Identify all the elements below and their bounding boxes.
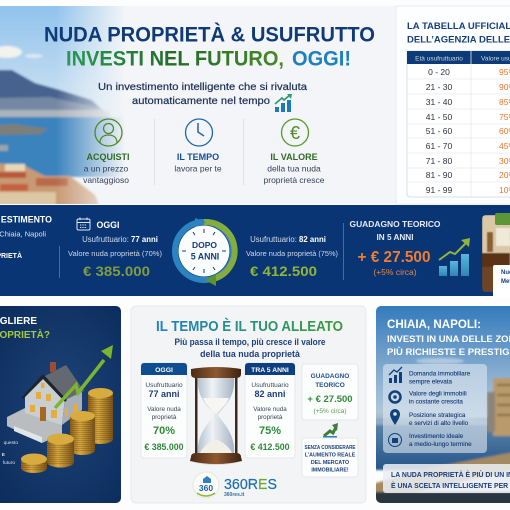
icon: euro: € [290, 123, 300, 143]
card: tra 5 anni: 75% [259, 425, 281, 437]
benefit: investimento: a medio-lungo termine [409, 441, 472, 448]
five years column: Usufruttuario: 82 anni [250, 235, 326, 244]
card: oggi: € 385.000 [144, 442, 184, 452]
feature: il valore: della tua nuda [267, 164, 321, 174]
card: senza considerare [302, 438, 358, 477]
logo: 360RES: 360res.it [224, 492, 245, 498]
heading: CHIAIA, NAPOLI: [387, 319, 481, 331]
banner left text [0, 214, 52, 260]
card: oggi: Valore nuda [147, 406, 181, 413]
card: oggi [141, 363, 187, 458]
title: OGGI! [292, 46, 351, 70]
table: 91 - 99 [426, 185, 453, 195]
five years column: Valore nuda proprietà (75%) [246, 251, 338, 258]
heading [387, 319, 510, 358]
theoretical gain: IN 5 ANNI [376, 233, 414, 242]
feature: il tempo [174, 152, 222, 174]
icon: growth chart [275, 94, 292, 112]
benefit: valore [390, 390, 467, 406]
card: tra 5 anni: TRA 5 ANNI [251, 367, 289, 374]
illustration: hourglass [190, 367, 242, 465]
title [44, 22, 375, 70]
card: oggi: Usufruttuario [145, 382, 183, 389]
card: oggi: 77 anni [148, 389, 180, 399]
feature: acquisti [83, 152, 130, 185]
title: INVESTI NEL FUTURO, [66, 46, 284, 70]
feature: il valore [264, 152, 325, 185]
icon: euro [282, 119, 308, 146]
panel: time is your ally [131, 306, 366, 503]
table: 61 - 70 [426, 141, 453, 151]
photo: Chiaia seafront [372, 302, 510, 506]
five years column: € 412.500 [250, 263, 317, 279]
banner left text: ESTIMENTO [1, 214, 52, 224]
table: 81 - 90 [426, 170, 453, 180]
card: guadagno teorico: TEORICO [315, 382, 345, 389]
card: guadagno teorico [302, 364, 358, 420]
today column: € 385.000 [83, 263, 150, 279]
card: guadagno teorico: + € 27.500 [307, 394, 353, 405]
card: senza considerare: DEL MERCATO [311, 460, 349, 466]
card: senza considerare: SENZA CONSIDERARE [304, 445, 356, 451]
feature: acquisti: ACQUISTI [86, 152, 130, 162]
card: tra 5 anni: Usufruttuario [251, 382, 289, 389]
benefit: posizione: Posizione strategica [409, 412, 466, 419]
illustration: house and coins [7, 345, 113, 473]
card: tra 5 anni: proprietà [258, 414, 283, 421]
today column: OGGI [97, 220, 119, 230]
benefit: domanda [389, 367, 471, 386]
panel: chiaia, napoli [372, 302, 510, 506]
heading [0, 317, 50, 338]
table heading [407, 21, 510, 46]
subtitle: Un investimento intelligente che si rivaluta [98, 82, 307, 93]
subtitle [98, 82, 307, 107]
feature: il valore: IL VALORE [270, 152, 318, 162]
subheading: della tua nuda proprietà [200, 349, 300, 359]
card: tra 5 anni: 82 anni [254, 389, 286, 399]
benefit: valore: in costante crescita [409, 398, 463, 406]
five years column [246, 235, 338, 279]
card: tra 5 anni [245, 363, 295, 458]
caption fragments [2, 441, 18, 464]
heading: IL TEMPO È IL TUO ALLEATO [156, 318, 343, 335]
benefit: valore: Valore degli immobili [409, 390, 467, 398]
icon: clock [186, 119, 212, 146]
today column: Valore nuda proprietà (70%) [68, 251, 162, 258]
theoretical gain [350, 220, 441, 277]
logo: 360RES: 360RES [224, 477, 277, 493]
table: 41 - 50 [426, 112, 453, 122]
coin stack 4 [88, 388, 113, 444]
hero photo: Gulf of Naples [0, 2, 130, 208]
panel: official table [396, 6, 510, 204]
card: guadagno teorico: GUADAGNO [311, 373, 349, 380]
logo: 360RES [193, 472, 277, 498]
table: 71 - 80 [426, 156, 453, 166]
coin stack 1 [21, 454, 47, 473]
caption fragments: questo [4, 440, 18, 446]
benefit: posizione: e servizi di alto livello [409, 420, 469, 427]
table: Età usufruttuario [415, 56, 463, 62]
card: property photo [482, 213, 510, 298]
theoretical gain: + € 27.500 [358, 249, 430, 266]
table [407, 51, 510, 197]
title: NUDA PROPRIETÀ & USUFRUTTO [44, 22, 375, 46]
benefit: domanda: Domanda immobiliare [409, 370, 471, 378]
benefit: investimento: Investimento ideale [409, 433, 464, 440]
benefit: domanda: sempre elevata [409, 378, 453, 386]
feature: il tempo: lavora per te [174, 164, 222, 174]
icon: clock after 5 years: 5 ANNI [191, 252, 219, 262]
today column [68, 220, 162, 279]
coin stack 3 [70, 411, 95, 455]
subheading: Più passa il tempo, più cresce il valore [174, 337, 326, 347]
icon: person [95, 119, 122, 146]
coin stack 2 [47, 434, 74, 468]
banner left text: Chiaia, Napoli [0, 230, 46, 238]
panel: why choose [0, 306, 121, 503]
card: tra 5 anni: Valore nuda [253, 406, 287, 413]
logo: 360RES: 360 [199, 483, 213, 493]
benefit list [383, 364, 487, 453]
caption fragments: futuro [3, 460, 15, 466]
feature: acquisti: vantaggioso [83, 175, 129, 185]
subtitle: automaticamente nel tempo [132, 96, 270, 107]
panel: blue banner [0, 205, 510, 298]
panel: hero [0, 2, 396, 208]
table: 51 - 60 [426, 126, 453, 136]
card: tra 5 anni: € 412.500 [250, 442, 290, 452]
icon: calendar [77, 218, 90, 230]
card: oggi: OGGI [155, 367, 173, 374]
benefit: posizione [390, 409, 468, 425]
table: 0 - 20 [428, 67, 450, 77]
feature: il valore: proprietà cresce [264, 175, 325, 185]
card: guadagno teorico: (+5% circa) [313, 408, 347, 415]
card: oggi: 70% [153, 425, 175, 437]
today column: Usufruttuario: 77 anni [82, 235, 158, 244]
theoretical gain: (+5% circa) [373, 267, 417, 277]
icon: green arrow [323, 423, 338, 438]
callout [383, 464, 510, 493]
caption fragments: E [2, 452, 6, 458]
table: 31 - 40 [426, 97, 453, 107]
feature: acquisti: a un prezzo [84, 164, 128, 174]
subheading [174, 337, 326, 359]
table: 21 - 30 [426, 82, 453, 92]
icon: rising bars [439, 238, 470, 276]
icon: clock after 5 years [175, 218, 235, 286]
benefit: investimento [388, 433, 472, 448]
card: oggi: proprietà [152, 414, 177, 421]
theoretical gain: GUADAGNO TEORICO [350, 220, 441, 229]
icon: clock after 5 years: DOPO [192, 240, 217, 250]
feature: il tempo: IL TEMPO [177, 152, 219, 162]
card: senza considerare: IMMOBILIARE! [311, 468, 349, 474]
card: senza considerare: L’AUMENTO REALE [305, 452, 356, 458]
